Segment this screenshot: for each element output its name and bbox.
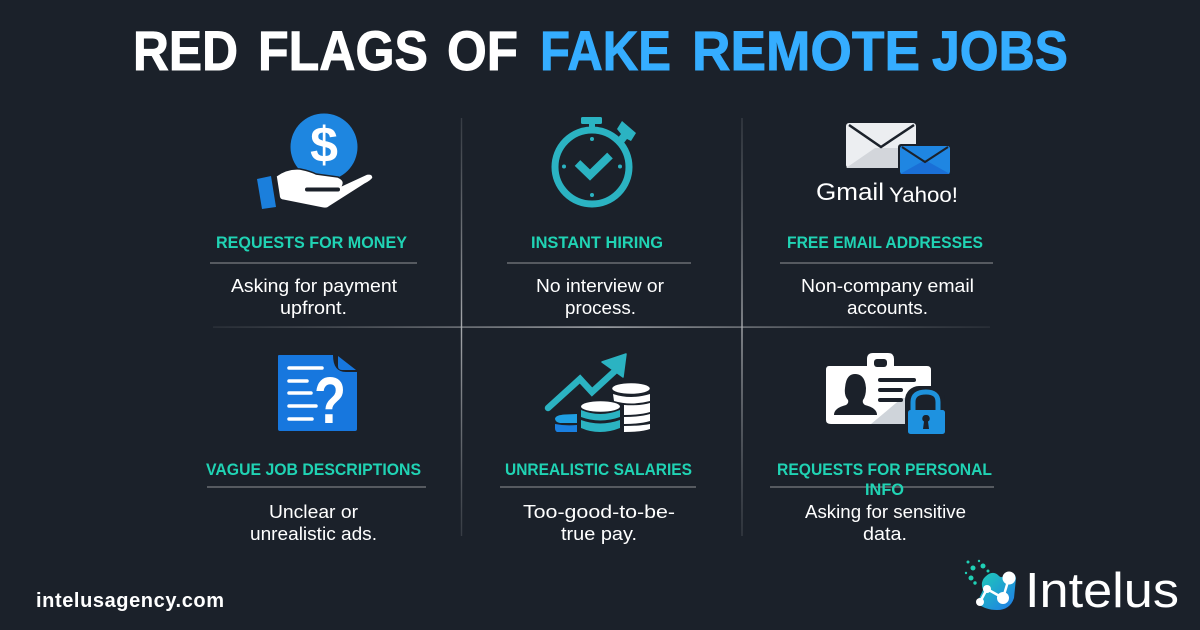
description <box>536 276 664 318</box>
description: data. <box>863 524 907 544</box>
panel: free email addresses <box>780 123 993 318</box>
title: FAKE <box>540 19 671 82</box>
description: process. <box>565 298 636 318</box>
heading: INFO <box>865 481 904 499</box>
text: Gmail and Yahoo: Gmail <box>816 179 884 206</box>
description: Unclear or <box>269 502 358 522</box>
description: true pay. <box>561 524 637 544</box>
description <box>805 502 966 544</box>
icon: hand holding coin: $ <box>310 117 338 173</box>
icon: rising arrow and coin stacks <box>548 354 650 432</box>
heading <box>777 461 992 499</box>
heading: REQUESTS FOR PERSONAL <box>777 461 992 479</box>
heading: FREE EMAIL ADDRESSES <box>787 234 983 252</box>
icon: ID badge with padlock <box>826 353 945 438</box>
panel: requests for money <box>210 114 417 318</box>
description <box>250 502 377 544</box>
panel: vague job descriptions <box>206 355 426 544</box>
description: Too-good-to-be- <box>523 502 675 522</box>
description <box>231 276 397 318</box>
heading: REQUESTS FOR MONEY <box>216 234 407 252</box>
title: FLAGS <box>258 19 428 82</box>
logo mark <box>965 560 1016 610</box>
icon: document with question mark <box>278 355 357 437</box>
logo wordmark: Intelus <box>1025 564 1179 618</box>
logo: Intelus <box>965 560 1179 618</box>
website url: intelusagency.com <box>36 590 224 612</box>
description <box>523 502 675 544</box>
description <box>801 276 974 318</box>
description: upfront. <box>280 298 347 318</box>
title: RED <box>133 19 238 82</box>
description: unrealistic ads. <box>250 524 377 544</box>
description: Non-company email <box>801 276 974 296</box>
panel: unrealistic salaries <box>500 354 696 544</box>
icon: document with question mark: ? <box>314 363 346 437</box>
description: No interview or <box>536 276 664 296</box>
heading: INSTANT HIRING <box>531 234 663 252</box>
title: JOBS <box>932 19 1068 82</box>
heading: VAGUE JOB DESCRIPTIONS <box>206 461 421 479</box>
title <box>133 19 1068 82</box>
panel: requests for personal info <box>770 353 994 544</box>
title: OF <box>447 19 518 82</box>
description: accounts. <box>847 298 928 318</box>
title: REMOTE <box>692 19 920 82</box>
icon: envelopes <box>846 123 952 176</box>
description: Asking for sensitive <box>805 502 966 522</box>
heading: UNREALISTIC SALARIES <box>505 461 692 479</box>
text: Gmail and Yahoo: Yahoo! <box>889 184 958 207</box>
icon: hand holding coin <box>257 114 373 209</box>
icon: stopwatch <box>555 117 636 204</box>
text: Gmail and Yahoo <box>816 179 958 207</box>
description: Asking for payment <box>231 276 397 296</box>
panel: instant hiring <box>507 117 691 318</box>
